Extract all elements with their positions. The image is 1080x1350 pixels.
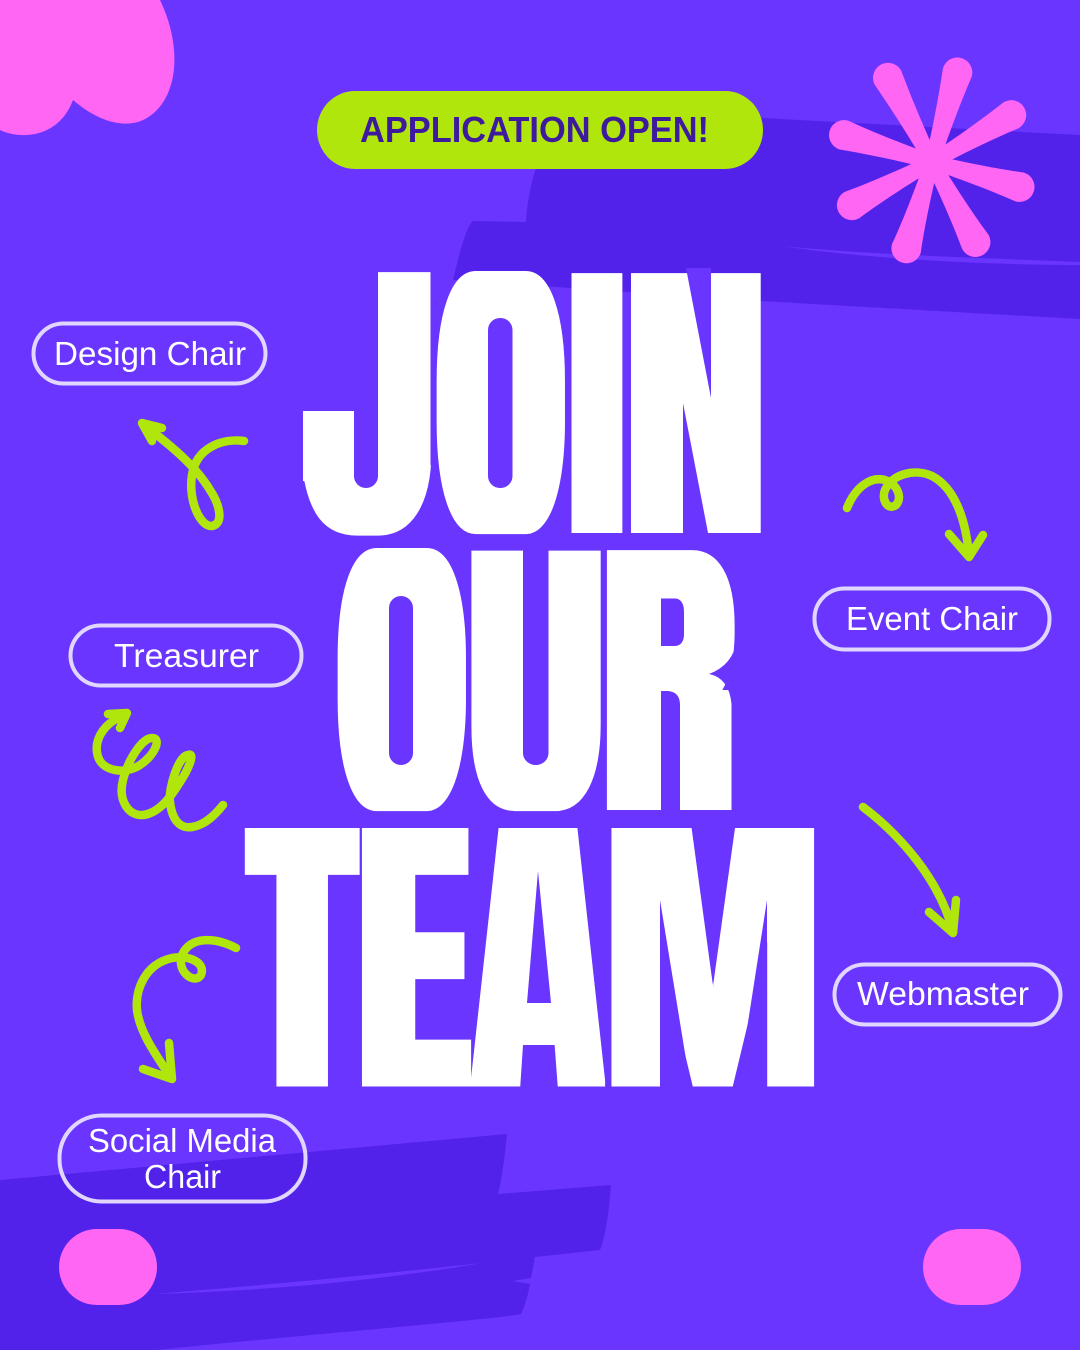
tag: event chair: [814, 588, 1050, 650]
arrow: to social media chair: [137, 940, 236, 1079]
tag: design chair: Design Chair: [54, 335, 246, 372]
word: join: I: [575, 197, 619, 609]
tag: social media chair: Chair: [144, 1158, 221, 1195]
word: join: [296, 196, 758, 609]
tag: social media chair: [60, 1116, 306, 1202]
word: our: R: [610, 473, 730, 886]
pink pill: bottom right: [923, 1229, 1021, 1305]
badge: application open: [317, 91, 763, 169]
word: team: E: [370, 751, 459, 1162]
arrow: to webmaster: [863, 807, 956, 933]
word: join: J: [308, 196, 437, 608]
tag: treasurer: Treasurer: [114, 637, 259, 674]
word: team: A: [498, 753, 578, 1162]
pink blob: top left: [0, 0, 174, 135]
pink pill: bottom left: [59, 1229, 157, 1305]
brush stroke: top right: [453, 118, 1080, 319]
arrow: to treasurer: [97, 713, 223, 827]
word: join: N: [633, 197, 758, 609]
tag: social media chair: Social Media: [88, 1122, 277, 1159]
tag: webmaster: Webmaster: [857, 975, 1029, 1012]
tag: event chair: Event Chair: [846, 600, 1018, 637]
word: team: T: [259, 751, 346, 1161]
word: our: O: [358, 504, 446, 856]
word: team: [259, 751, 826, 1162]
brush stroke: bottom left: [0, 1134, 611, 1350]
word: our: [358, 473, 762, 886]
tag: design chair: [34, 324, 266, 384]
word: join: O: [457, 227, 545, 579]
word: team: M: [599, 751, 826, 1162]
tag: webmaster: [834, 964, 1060, 1024]
pink asterisk star: [825, 54, 1038, 267]
badge: application open: APPLICATION OPEN!: [360, 109, 709, 150]
arrow: to event chair: [847, 472, 983, 557]
tag: treasurer: [70, 626, 302, 686]
arrow: to design chair: [142, 423, 244, 526]
title: join our team: [259, 196, 826, 1162]
word: our: U: [482, 503, 590, 856]
